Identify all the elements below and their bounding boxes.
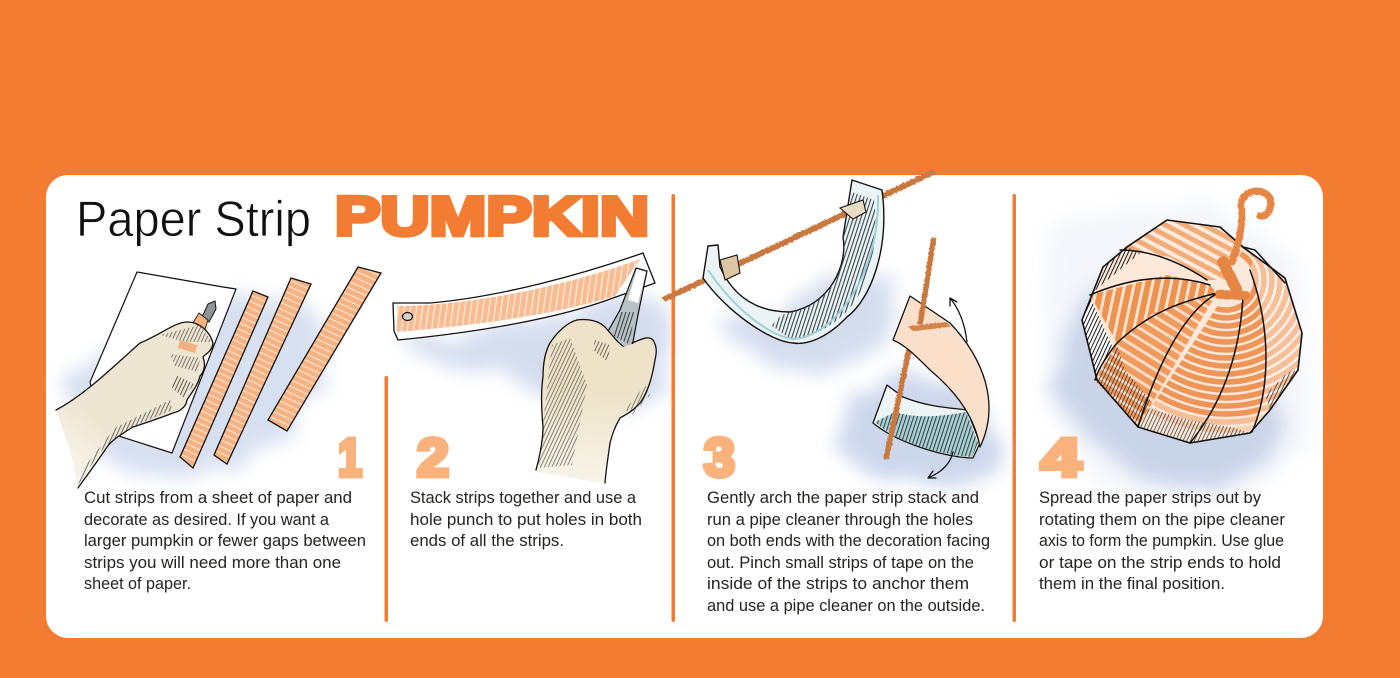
- panel: step 3 arching strips: [665, 172, 1000, 485]
- title: Paper Strip PUMPKIN: [76, 185, 649, 247]
- text: step 4 instructions: or tape on the strip ends to hold: [1039, 554, 1281, 572]
- watercolor shadow step 3: [715, 270, 905, 375]
- panel: step 4 pumpkin: [1040, 187, 1306, 500]
- hand holding punch: [536, 319, 656, 483]
- text: step 3 instructions: and use a pipe cleaner on the outside.: [707, 597, 985, 615]
- step numbers: [338, 428, 1081, 488]
- pipe cleaner stem: [1219, 191, 1271, 296]
- text: step 1 instructions: [84, 489, 366, 593]
- text: step 4 instructions: [1039, 489, 1286, 593]
- punched hole: [402, 312, 412, 320]
- panel: step 1 cut strips: [56, 267, 381, 488]
- text: step 3 instructions: out. Pinch small strips of tape on the: [707, 554, 974, 572]
- text: step 3 instructions: run a pipe cleaner through the holes: [707, 511, 973, 529]
- text: step 4 instructions: axis to form the pumpkin. Use glue: [1039, 532, 1284, 550]
- title: Paper Strip PUMPKIN: Paper Strip: [76, 191, 311, 247]
- paper strip stack: [393, 253, 655, 340]
- spiral strip with pipe cleaner: [873, 240, 989, 458]
- marker rings on front wedges: [1148, 248, 1302, 433]
- watercolor shadow step 2: [395, 298, 668, 410]
- step numbers: 2: [417, 428, 449, 488]
- arrow: rotate up: [950, 298, 967, 342]
- icon: hole punch tool: [607, 268, 647, 347]
- arched strip stack: [703, 180, 884, 343]
- arrow: rotate down: [928, 452, 953, 478]
- shaded underside: [1082, 297, 1138, 427]
- text: step 4 instructions: them in the final position.: [1039, 575, 1225, 593]
- watercolor shadow step 4: [1050, 280, 1285, 490]
- pipe cleaner through arch: [665, 172, 933, 299]
- tape pieces: [840, 200, 866, 219]
- text: step 1 instructions: decorate as desired. If you want a: [84, 511, 330, 529]
- text: step 2 instructions: hole punch to put holes in both: [410, 511, 642, 529]
- white card panel: [46, 175, 1323, 638]
- text: step 4 instructions: Spread the paper strips out by: [1039, 489, 1262, 507]
- text: step 1 instructions: sheet of paper.: [84, 575, 191, 593]
- text: step 2 instructions: Stack strips together and use a: [410, 489, 637, 507]
- text: step 3 instructions: Gently arch the paper strip stack and: [707, 489, 979, 507]
- text: step 4 instructions: rotating them on the pipe cleaner: [1039, 511, 1286, 529]
- text: step 3 instructions: inside of the strips to anchor them: [707, 575, 969, 593]
- panel: step 2 hole punch: [393, 253, 668, 483]
- outline and ribs: [1082, 220, 1302, 443]
- text: step 2 instructions: ends of all the strips.: [410, 532, 564, 550]
- pumpkin body: [1081, 219, 1303, 444]
- text: step 3 instructions: on both ends with the decoration facing: [707, 532, 990, 550]
- paper sheet: [90, 272, 236, 453]
- text: step 2 instructions: [410, 489, 642, 550]
- text: step 1 instructions: larger pumpkin or fewer gaps between: [84, 532, 366, 550]
- decorated strips: [180, 267, 381, 468]
- text: step 3 instructions: [707, 489, 990, 615]
- watercolor shadow step 1: [65, 300, 325, 478]
- icon: craft knife: [186, 301, 216, 345]
- text: step 1 instructions: strips you will need more than one: [84, 554, 341, 572]
- hand holding knife: [56, 322, 213, 488]
- title: Paper Strip PUMPKIN: PUMPKIN: [335, 185, 649, 247]
- lighter right wedge: [1250, 252, 1302, 432]
- step numbers: 1: [338, 428, 362, 488]
- text: step 1 instructions: Cut strips from a sheet of paper and: [84, 489, 352, 507]
- step numbers: 3: [704, 428, 735, 488]
- divider lines: [384, 194, 1016, 622]
- step numbers: 4: [1041, 428, 1081, 488]
